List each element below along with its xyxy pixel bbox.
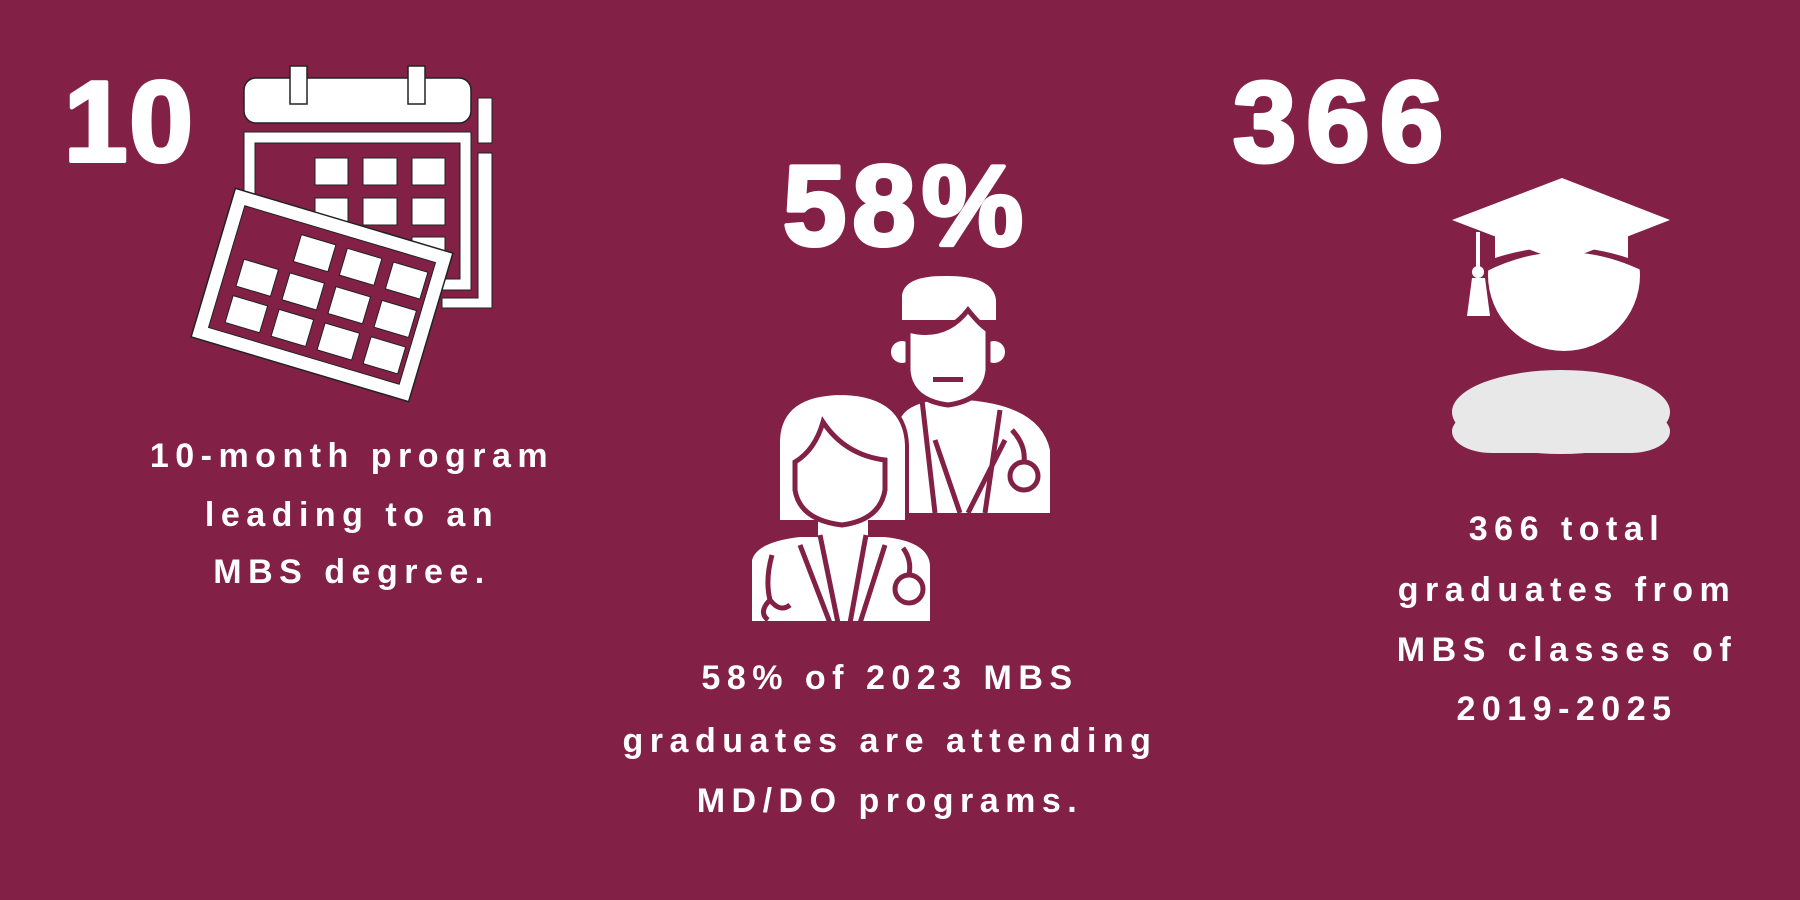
text: 10-month program: leading to an xyxy=(205,496,499,534)
text: 10-month program: 10-month program xyxy=(150,437,554,475)
man doctor xyxy=(891,276,1050,513)
icon: graduate xyxy=(1452,178,1670,454)
icon: doctors xyxy=(750,276,1050,623)
text: 366 total graduates: MBS classes of xyxy=(1397,631,1737,669)
text: 366 total graduates xyxy=(1397,510,1737,728)
icon: calendar xyxy=(191,66,492,402)
text: 366 total graduates: graduates from xyxy=(1398,571,1736,609)
text: 58% of 2023 xyxy=(623,659,1157,820)
text: 10-month program xyxy=(150,437,554,591)
stat: 58%: 58% xyxy=(783,143,1029,270)
stat: 366: 366 xyxy=(1233,59,1453,186)
text: 366 total graduates: 2019-2025 xyxy=(1456,690,1678,728)
text: 58% of 2023: 58% of 2023 MBS xyxy=(701,659,1079,697)
stat: 10: 10 xyxy=(64,59,195,186)
text: 58% of 2023: graduates are attending xyxy=(623,722,1157,760)
text: 10-month program: MBS degree. xyxy=(213,553,491,591)
woman doctor xyxy=(750,393,932,623)
text: 58% of 2023: MD/DO programs. xyxy=(697,782,1083,820)
text: 366 total graduates: 366 total xyxy=(1469,510,1665,548)
